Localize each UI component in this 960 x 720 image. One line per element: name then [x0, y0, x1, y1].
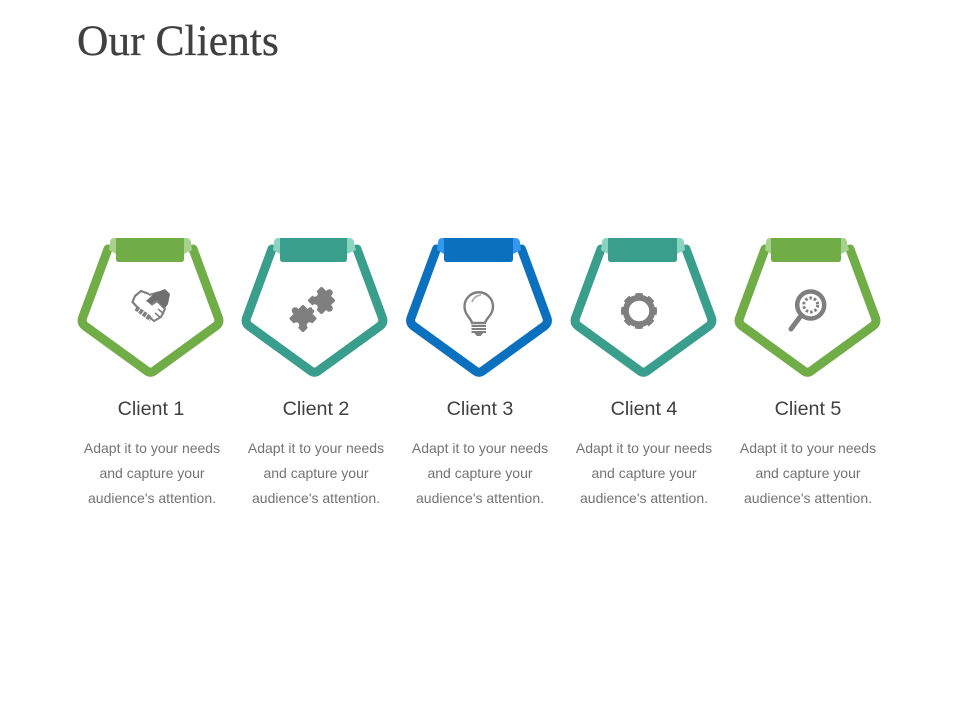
client 5 name: Client 5 — [775, 398, 841, 420]
client 5 description: and capture your — [755, 465, 861, 481]
pentagon 2: teal with puzzle — [246, 238, 383, 372]
client 1 name: Client 1 — [118, 398, 184, 420]
pentagon 4: teal with gear — [575, 238, 712, 372]
client 1 description: audience's attention. — [88, 490, 216, 506]
client 2 description: audience's attention. — [252, 490, 380, 506]
client 5 description: audience's attention. — [744, 490, 872, 506]
icon: gear — [623, 295, 655, 327]
title: Our Clients — [77, 17, 279, 65]
client 4 description — [576, 440, 712, 506]
icon: light bulb — [464, 292, 493, 336]
client 3 description: audience's attention. — [416, 490, 544, 506]
client 3 description: Adapt it to your needs — [412, 440, 548, 456]
client 4 name: Client 4 — [611, 398, 677, 420]
client 1 description — [84, 440, 220, 506]
client 5 description: Adapt it to your needs — [740, 440, 876, 456]
client 2 description: Adapt it to your needs — [248, 440, 384, 456]
client 5 description — [740, 440, 876, 506]
client 4 description: and capture your — [591, 465, 697, 481]
pentagon 3: blue with light bulb — [411, 238, 547, 372]
client 4 description: Adapt it to your needs — [576, 440, 712, 456]
client 2 name: Client 2 — [283, 398, 349, 420]
puzzle piece lower — [284, 298, 322, 336]
icon: magnifier — [791, 292, 824, 329]
client 3 name: Client 3 — [447, 398, 513, 420]
pentagon 1: green with handshake — [82, 238, 219, 372]
pentagon 5: green with magnifier — [739, 238, 876, 372]
icon: puzzle pieces — [284, 281, 342, 336]
client 1 description: and capture your — [99, 465, 205, 481]
client 2 description — [248, 440, 384, 506]
client 4 description: audience's attention. — [580, 490, 708, 506]
client 2 description: and capture your — [263, 465, 369, 481]
client 1 description: Adapt it to your needs — [84, 440, 220, 456]
client 3 description — [412, 440, 548, 506]
icon: handshake — [132, 289, 170, 321]
client 3 description: and capture your — [427, 465, 533, 481]
puzzle piece upper — [304, 281, 342, 320]
